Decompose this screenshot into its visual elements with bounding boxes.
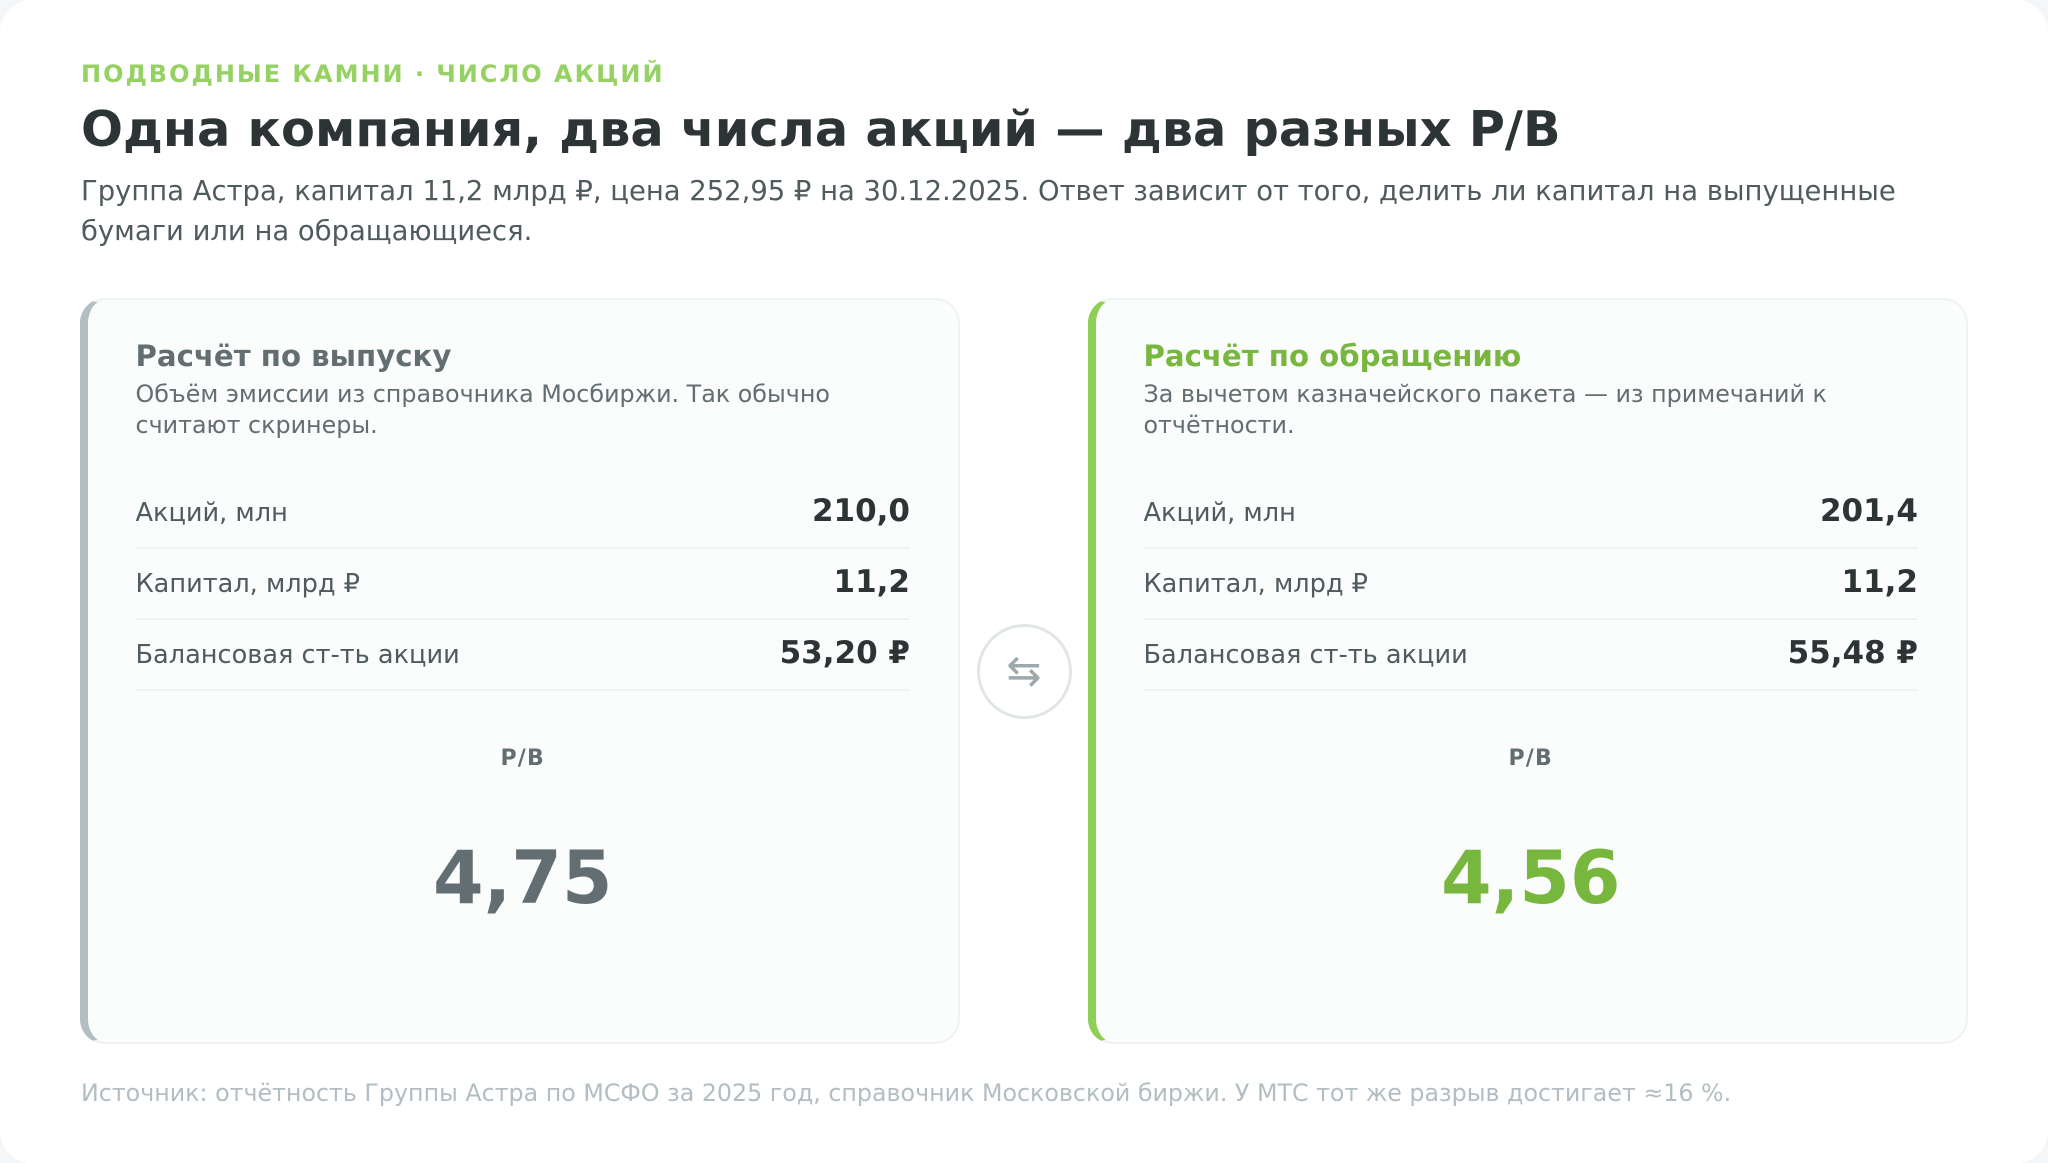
P/B label issued: P/B xyxy=(500,746,545,771)
row: shares issued: 210,0 xyxy=(812,493,910,529)
row: equity outstanding: Капитал, млрд ₽ xyxy=(1144,569,1368,599)
icon: swap arrows in circle: ⇆ xyxy=(1006,646,1042,695)
icon: swap arrows in circle xyxy=(976,624,1072,719)
subtitle: бумаги или на обращающиеся. xyxy=(81,216,532,247)
panel heading: issued: Расчёт по выпуску xyxy=(136,339,451,373)
panel description: issued xyxy=(136,380,830,439)
eyebrow label: ПОДВОДНЫЕ КАМНИ · ЧИСЛО АКЦИЙ xyxy=(81,60,665,88)
row: book value per share issued: 53,20 ₽ xyxy=(780,635,910,671)
row: shares outstanding xyxy=(1144,477,1918,549)
row: equity outstanding: 11,2 xyxy=(1842,564,1918,600)
panel: calculation by issued shares xyxy=(80,298,960,1044)
row: book value per share outstanding xyxy=(1144,619,1918,691)
row: book value per share issued: Балансовая ст-ть акции xyxy=(136,640,460,670)
P/B value issued: 4,75 xyxy=(433,836,613,921)
P/B label outstanding: P/B xyxy=(1508,746,1553,771)
title: Одна компания, два числа акций — два разных P/B xyxy=(81,100,1561,158)
subtitle xyxy=(81,176,1896,247)
row: shares outstanding: 201,4 xyxy=(1820,493,1918,529)
row: equity outstanding xyxy=(1144,548,1918,620)
P/B value outstanding: 4,56 xyxy=(1441,836,1621,921)
row: equity issued: 11,2 xyxy=(834,564,910,600)
panel description: issued: считают скринеры. xyxy=(136,411,378,439)
row: book value per share issued xyxy=(136,619,910,691)
row: shares outstanding: Акций, млн xyxy=(1144,498,1296,528)
row: book value per share outstanding: 55,48 ₽ xyxy=(1788,635,1918,671)
row: equity issued: Капитал, млрд ₽ xyxy=(136,569,360,599)
panel heading: outstanding: Расчёт по обращению xyxy=(1144,339,1521,373)
panel description: issued: Объём эмиссии из справочника Мосбиржи. Так обычно xyxy=(136,380,830,408)
source note: Источник: отчётность Группы Астра по МСФО за 2025 год, справочник Московской биржи. У МТС тот же разрыв достигает ≈16 %. xyxy=(81,1079,1731,1107)
subtitle: Группа Астра, капитал 11,2 млрд ₽, цена 252,95 ₽ на 30.12.2025. Ответ зависит от того, делить ли капитал на выпущенные xyxy=(81,176,1896,207)
panel description: outstanding: За вычетом казначейского пакета — из примечаний к xyxy=(1144,380,1827,408)
row: equity issued xyxy=(136,548,910,620)
row: shares issued: Акций, млн xyxy=(136,498,288,528)
row: book value per share outstanding: Балансовая ст-ть акции xyxy=(1144,640,1468,670)
panel description: outstanding xyxy=(1144,380,1827,439)
panel: calculation by outstanding shares xyxy=(1088,298,1968,1044)
panel description: outstanding: отчётности. xyxy=(1144,411,1295,439)
row: shares issued xyxy=(136,477,910,549)
